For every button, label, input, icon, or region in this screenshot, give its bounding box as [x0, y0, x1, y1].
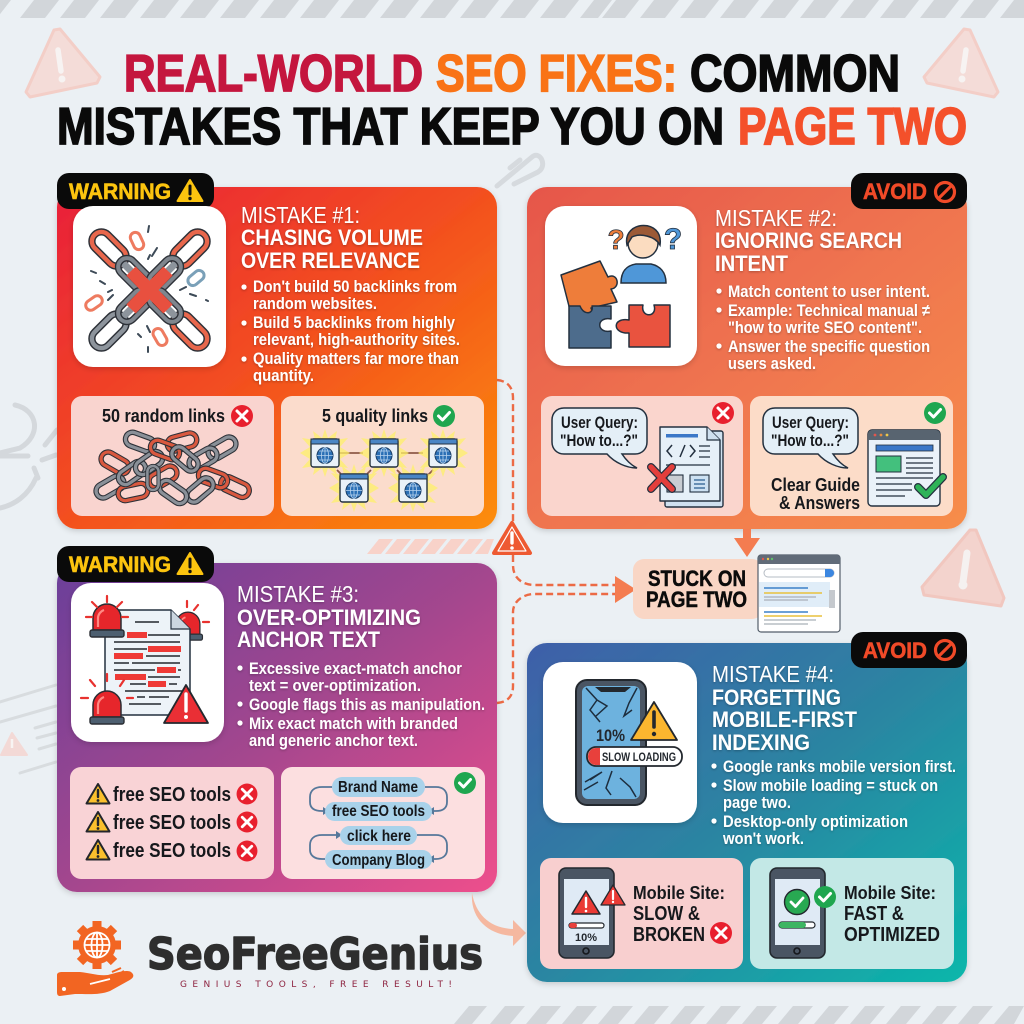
caption: fast and optimized: FAST &	[844, 903, 904, 925]
speech bubble: user query	[552, 408, 647, 468]
bullet list: mistake 2: users asked.	[728, 354, 816, 373]
badge: avoid: AVOID	[863, 638, 927, 663]
comparison card: clear guide	[750, 396, 953, 516]
speech bubble: user query: "How to...?"	[560, 432, 638, 450]
comparison card: repeated anchor text: free SEO tools	[113, 783, 231, 806]
title: SEO FIXES:	[436, 45, 677, 103]
pill: brand name: Brand Name	[338, 779, 418, 796]
heading: mistake 1	[241, 202, 423, 273]
bullet list: mistake 2: "how to write SEO content".	[728, 318, 922, 337]
panel: mistake 1	[57, 173, 497, 529]
logo: SeoFreeGenius: SeoFreeGenius	[147, 929, 483, 980]
bottom hazard stripes	[454, 1006, 1024, 1024]
bullet list: mistake 2	[716, 282, 931, 373]
arrow: mistake 2 to stuck box	[734, 529, 760, 557]
heading: mistake 3	[237, 581, 421, 652]
bullet list: mistake 2: Answer the specific question	[728, 337, 930, 356]
comparison card: 5 quality links	[281, 396, 484, 516]
title: REAL-WORLD	[124, 45, 423, 103]
caption: clear guide: & Answers	[779, 493, 860, 513]
badge: warning	[57, 173, 214, 209]
phone icon: fast	[770, 868, 825, 958]
watermark: faded broken chain left	[0, 405, 57, 508]
green check	[918, 477, 943, 495]
comparison card: slow and broken	[540, 858, 743, 969]
bullet list: mistake 2: Example: Technical manual ≠	[728, 301, 931, 320]
bullet list: mistake 1: Quality matters far more than	[253, 349, 459, 368]
bullet list: mistake 1: Don't build 50 backlinks from	[253, 277, 457, 296]
bullet list: mistake 3: text = over-optimization.	[249, 676, 421, 695]
bullet list: mistake 1: random websites.	[253, 294, 377, 313]
document icon	[660, 427, 723, 507]
logo: SeoFreeGenius	[57, 921, 483, 996]
heading: mistake 3: OVER-OPTIMIZING	[237, 605, 421, 630]
panel background	[527, 187, 967, 529]
dashed connector: mistake 3 to stuck box	[497, 594, 616, 703]
icon card: person and puzzle	[545, 206, 697, 366]
comparison card: 50 random links	[71, 396, 274, 516]
bullet list: mistake 1: relevant, high-authority sites.	[253, 330, 460, 349]
hazard stripes accent	[367, 539, 494, 554]
callout: stuck on page two: STUCK ON	[648, 566, 746, 591]
panel background	[57, 563, 497, 892]
icon card: broken chain X	[73, 206, 226, 367]
bullet list: mistake 1	[241, 277, 460, 385]
comparison card: fast and optimized	[750, 858, 954, 969]
badge: avoid	[851, 173, 967, 209]
heading: mistake 2: INTENT	[715, 251, 789, 276]
heading: mistake 4	[712, 661, 858, 755]
arrow head into stuck box	[615, 576, 636, 603]
heading: mistake 4: MOBILE-FIRST	[712, 707, 858, 732]
bullet list: mistake 3: Mix exact match with branded	[249, 714, 458, 733]
heading: mistake 2: IGNORING SEARCH	[715, 228, 902, 253]
icon card: cracked phone: SLOW LOADING	[602, 752, 676, 764]
watermark: faded warning triangle right	[922, 530, 1004, 606]
red cross	[651, 467, 672, 489]
panel: mistake 2	[527, 173, 967, 529]
panel: mistake 4	[527, 632, 967, 982]
caption: slow and broken	[633, 883, 725, 946]
panel background	[527, 643, 967, 982]
curved arrow to mistake 4	[472, 893, 526, 946]
bullet list: mistake 4: page two.	[723, 793, 791, 812]
bullet list: mistake 4: Slow mobile loading = stuck on	[723, 776, 938, 795]
caption: slow and broken: BROKEN	[633, 924, 705, 946]
title: COMMON	[690, 45, 900, 103]
icon card: cracked phone: 10%	[596, 726, 625, 745]
logo icon: gear and globe	[57, 921, 133, 996]
bullet list: mistake 3: Google flags this as manipulation.	[249, 695, 485, 714]
watermark: faded document and warning left	[0, 685, 56, 773]
title	[57, 45, 967, 156]
callout: stuck on page two	[633, 555, 840, 632]
speech bubble: user query	[763, 408, 858, 468]
warning triangle on connector	[494, 523, 530, 553]
icon card: cracked phone	[543, 662, 697, 823]
comparison card: 50 random links: 50 random links	[102, 406, 225, 426]
browser window icon	[868, 430, 940, 506]
comparison card: wrong content	[541, 396, 743, 516]
heading: mistake 3: ANCHOR TEXT	[237, 627, 381, 652]
bullet list: mistake 4	[711, 757, 956, 848]
heading: mistake 3: MISTAKE #3:	[237, 581, 359, 607]
caption: clear guide: Clear Guide	[771, 475, 860, 495]
pill: click here: click here	[347, 828, 411, 845]
heading: mistake 1: CHASING VOLUME	[241, 225, 423, 250]
heading: mistake 1: MISTAKE #1:	[241, 202, 360, 228]
icon card: sirens and document	[71, 583, 224, 742]
top hazard stripes	[0, 0, 1024, 18]
speech bubble: user query: User Query:	[561, 414, 638, 432]
caption: fast and optimized	[844, 883, 940, 946]
badge: avoid	[851, 632, 967, 668]
bullet list: mistake 1: quantity.	[253, 366, 314, 385]
watermark: faded warning triangle top left	[26, 29, 100, 97]
caption: clear guide	[771, 475, 860, 513]
heading: mistake 2	[715, 205, 902, 276]
heading: mistake 1: OVER RELEVANCE	[241, 248, 420, 273]
callout: stuck on page two: PAGE TWO	[646, 587, 747, 612]
speech bubble: user query: User Query:	[772, 414, 849, 432]
bullet list: mistake 3	[237, 659, 485, 750]
panel background	[57, 187, 497, 529]
icon card: person and puzzle: ?	[607, 224, 625, 255]
bullet list: mistake 4: won't work.	[722, 829, 804, 848]
phone icon: slow	[559, 868, 625, 958]
title: MISTAKES THAT KEEP YOU ON	[57, 98, 724, 156]
watermark: faded chain link top centre	[497, 155, 543, 186]
speech bubble: user query: "How to...?"	[771, 432, 849, 450]
icon card: person and puzzle: ?	[664, 223, 682, 256]
heading: mistake 2: MISTAKE #2:	[715, 205, 837, 231]
bullet list: mistake 4: Google ranks mobile version first.	[723, 757, 956, 776]
comparison card: varied anchor text	[281, 767, 485, 879]
caption: slow and broken: SLOW &	[633, 903, 700, 925]
pill: free SEO tools: free SEO tools	[332, 803, 425, 820]
bullet list: mistake 2: Match content to user intent.	[728, 282, 930, 301]
bullet list: mistake 3: and generic anchor text.	[249, 731, 418, 750]
bullet list: mistake 4: Desktop-only optimization	[723, 812, 908, 831]
comparison card: repeated anchor text: free SEO tools	[113, 839, 231, 862]
badge: avoid: AVOID	[863, 179, 927, 204]
panel: mistake 3	[57, 546, 497, 892]
heading: mistake 4: INDEXING	[712, 730, 810, 755]
search results browser	[758, 555, 840, 632]
pill: company blog: Company Blog	[332, 852, 425, 869]
badge: warning: WARNING	[69, 552, 171, 577]
badge: warning: WARNING	[69, 179, 171, 204]
bullet list: mistake 1: Build 5 backlinks from highly	[253, 313, 455, 332]
bullet list: mistake 3: Excessive exact-match anchor	[249, 659, 462, 678]
comparison card: repeated anchor text	[70, 767, 274, 879]
heading: mistake 4: FORGETTING	[712, 685, 841, 710]
dashed connector: mistake 1 to stuck box	[497, 380, 616, 585]
comparison card: 5 quality links: 5 quality links	[322, 406, 428, 426]
logo: SeoFreeGenius: GENIUS TOOLS, FREE RESULT!	[180, 980, 452, 990]
heading: mistake 4: MISTAKE #4:	[712, 661, 834, 687]
caption: fast and optimized: OPTIMIZED	[844, 924, 940, 946]
comparison card: repeated anchor text: free SEO tools	[113, 811, 231, 834]
title: PAGE TWO	[738, 98, 967, 156]
caption: fast and optimized: Mobile Site:	[844, 883, 936, 903]
badge: warning	[57, 546, 214, 582]
caption: slow and broken: Mobile Site:	[633, 883, 725, 903]
watermark: faded warning triangle top right	[924, 29, 998, 97]
phone icon: slow: 10%	[575, 932, 597, 944]
